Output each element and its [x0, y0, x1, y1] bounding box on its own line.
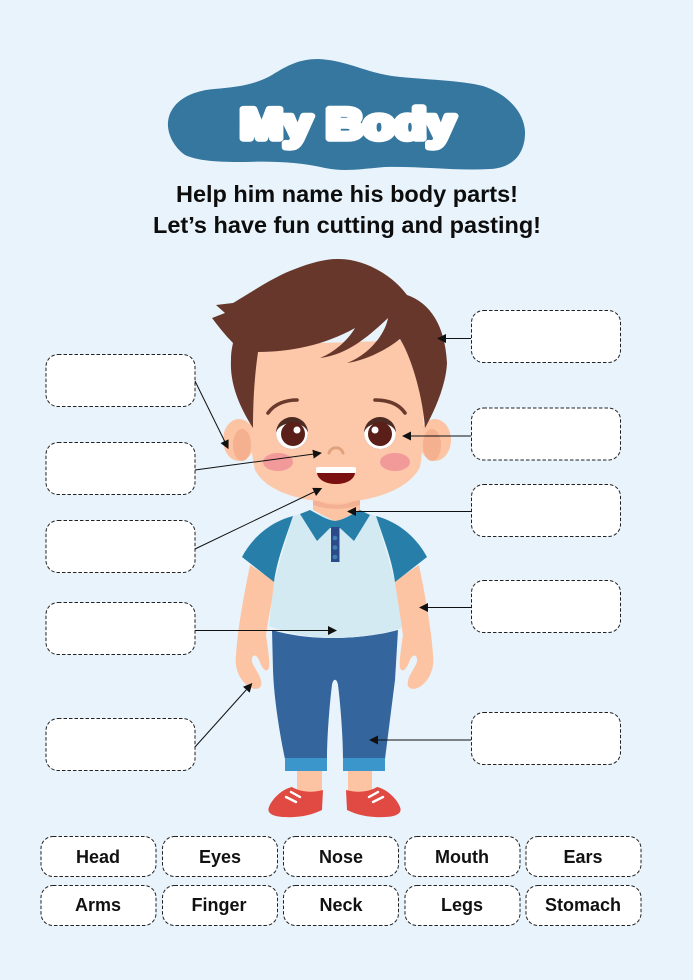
card: Mouth — [405, 836, 520, 876]
shoes — [268, 787, 401, 817]
card: Head — [41, 836, 156, 876]
instructions: Help him name his body parts! — [176, 181, 518, 207]
arrow: to ear — [195, 381, 225, 442]
answer boxes: left — [46, 354, 195, 770]
hair — [212, 259, 447, 428]
legs — [297, 768, 372, 798]
card: Nose — [284, 836, 398, 876]
title banner — [168, 59, 525, 170]
arrow: to mouth — [195, 492, 315, 549]
card: Legs: Legs — [441, 895, 483, 915]
card: Finger — [162, 886, 278, 926]
neck — [313, 490, 360, 522]
arrow: to leg — [377, 739, 471, 741]
title banner: My Body — [240, 100, 456, 148]
cheeks — [263, 453, 410, 471]
card: Arms: Arms — [75, 895, 121, 915]
ears — [223, 419, 451, 461]
mouth — [316, 467, 356, 484]
arrow: to head — [445, 338, 471, 340]
answer boxes: right — [472, 310, 620, 764]
arrows — [195, 338, 471, 747]
card: Ears: Ears — [563, 847, 603, 867]
instructions: Let’s have fun cutting and pasting! — [153, 212, 541, 238]
card: Ears — [526, 836, 641, 876]
card: Arms — [41, 886, 156, 926]
pants — [272, 630, 398, 771]
card: Neck: Neck — [319, 895, 364, 915]
card: Stomach — [526, 886, 641, 926]
arrow: to eye — [410, 435, 471, 437]
card: Eyes: Eyes — [199, 847, 241, 867]
arrow: to fingers — [195, 689, 247, 747]
card: Stomach: Stomach — [545, 895, 621, 915]
nose — [329, 448, 343, 453]
card: Head: Head — [76, 847, 120, 867]
shirt — [242, 514, 427, 638]
arrow: to arm — [427, 606, 471, 608]
card: Legs — [405, 886, 520, 926]
word cards — [41, 836, 641, 926]
instructions — [153, 181, 541, 238]
placket — [331, 527, 340, 562]
arrow: to nose — [195, 454, 314, 470]
eyes — [276, 417, 396, 449]
card: Neck — [284, 886, 398, 926]
eyebrows — [268, 400, 405, 413]
boy illustration — [212, 259, 451, 817]
face — [249, 340, 423, 502]
card: Eyes — [162, 836, 278, 876]
collar — [300, 510, 370, 541]
arrow: to neck — [355, 510, 471, 512]
arrow: to stomach — [195, 630, 329, 632]
card: Finger: Finger — [191, 895, 247, 915]
card: Nose: Nose — [319, 847, 363, 867]
card: Mouth: Mouth — [435, 847, 489, 867]
arms — [236, 565, 433, 689]
